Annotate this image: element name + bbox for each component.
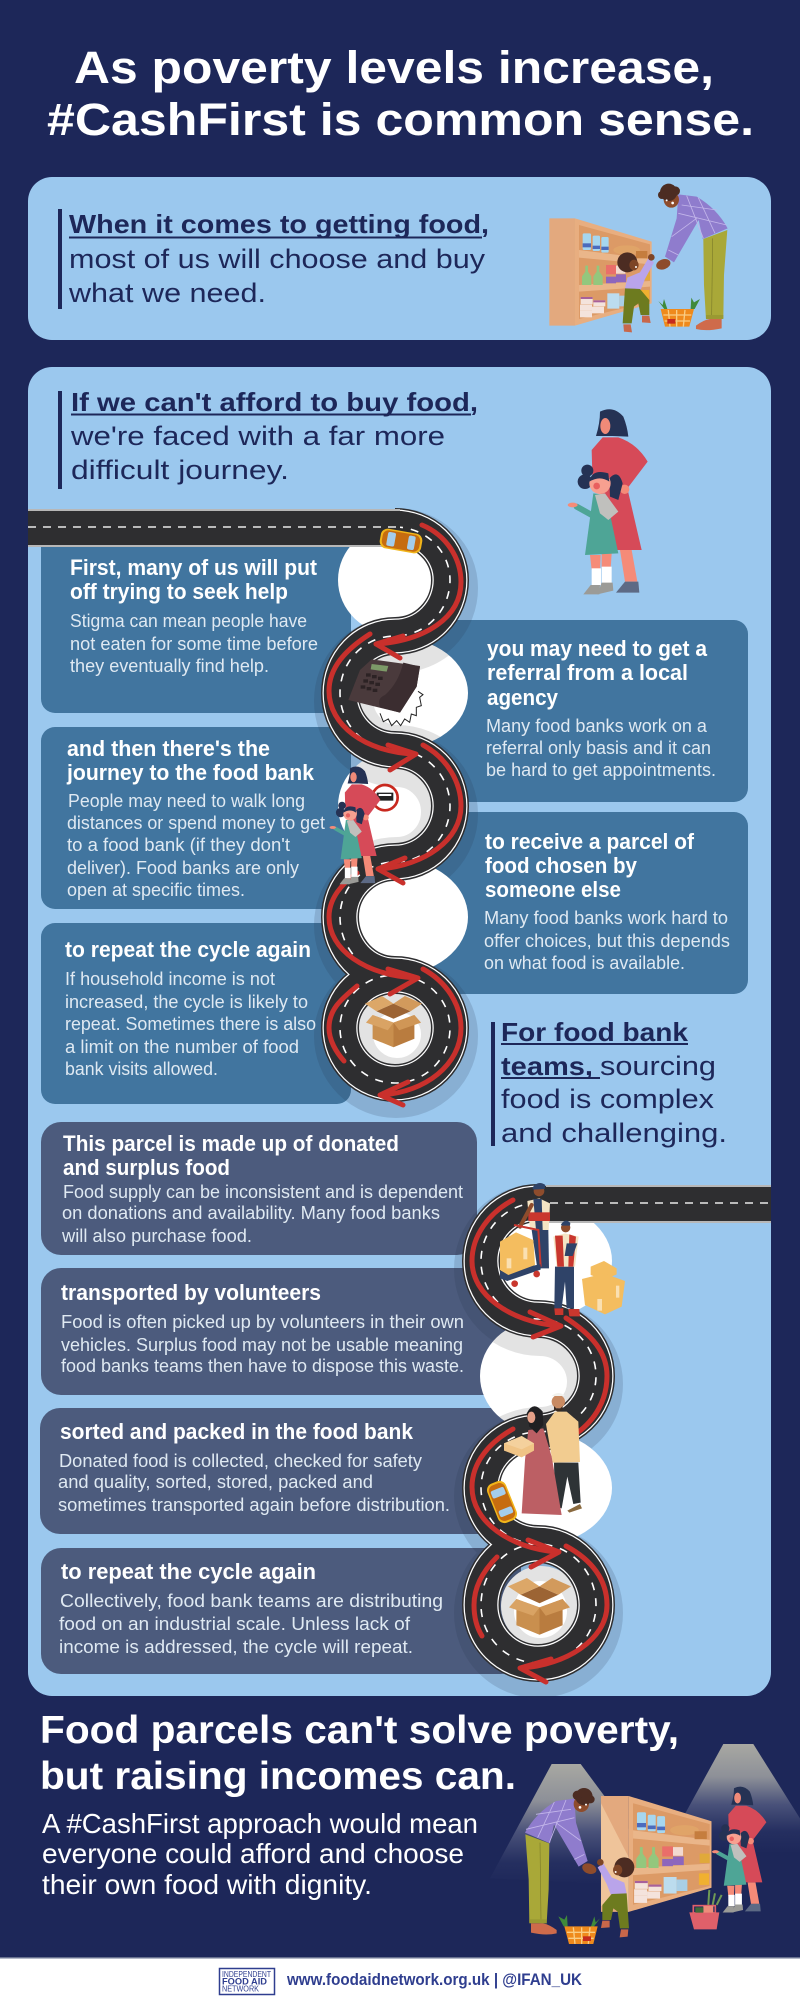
text block: put off seeking help: First, many of us will put [70, 555, 317, 580]
text block: if we can't afford to buy food: If we can't afford to buy food, [71, 387, 478, 417]
panel backgrounds: food bank teams journey [40, 1122, 521, 1674]
text block: parcel chosen by someone else: offer choices, but this depends [484, 930, 730, 951]
text block: put off seeking help: not eaten for some time before [70, 633, 318, 654]
text block: transported by volunteers: transported by volunteers [61, 1280, 321, 1305]
icon: families shopping under spotlights [490, 1744, 800, 1944]
text block: transported by volunteers: vehicles. Surplus food may not be usable meaning [61, 1334, 463, 1355]
text block: repeat the cycle, household: to repeat the cycle again [65, 937, 311, 962]
text block: journey to the food bank: open at specific times. [67, 879, 245, 900]
text block: referral from a local agency: you may need to get a [487, 636, 707, 661]
text block: sorted and packed: sorted and packed in the food bank [60, 1419, 413, 1444]
text block: put off seeking help: they eventually find help. [70, 655, 269, 676]
text block: journey to the food bank: and then there's the [67, 736, 270, 761]
text block: referral from a local agency: referral only basis and it can [486, 737, 711, 758]
text block: cash first approach: everyone could afford and choose [42, 1838, 464, 1869]
text block: journey to the food bank [66, 736, 325, 900]
icon: parcel box [365, 996, 422, 1047]
text block: for food bank teams: For food bank [501, 1017, 689, 1047]
text block: donated and surplus food: Food supply can be inconsistent and is dependent [63, 1181, 463, 1202]
icon: couple with box [504, 1393, 582, 1515]
text block: referral from a local agency: Many food banks work on a [486, 715, 708, 736]
text block: referral from a local agency: agency [487, 685, 558, 710]
footer band [0, 1957, 800, 2000]
text block: for food bank teams [491, 1017, 727, 1148]
text block: for food bank teams: food is complex [501, 1084, 715, 1114]
text block: donated and surplus food: and surplus food [63, 1155, 230, 1180]
text block: put off seeking help [70, 555, 318, 676]
title: As poverty levels increase, [74, 42, 714, 93]
chart: winding road, household journey [28, 509, 468, 1105]
text block: repeat the cycle, household: repeat. Sometimes there is also [65, 1013, 316, 1034]
panel: getting food [28, 177, 771, 340]
text block: repeat the cycle, household [65, 937, 316, 1079]
text block: repeat the cycle, food banks [59, 1559, 443, 1657]
text block: journey to the food bank: journey to the food bank [66, 760, 314, 785]
text block: repeat the cycle, food banks: food on an industrial scale. Unless lack of [59, 1613, 411, 1634]
text block: if we can't afford to buy food: difficult journey. [71, 455, 289, 485]
title: #CashFirst is common sense. [47, 94, 754, 145]
text block: repeat the cycle, household: bank visits allowed. [65, 1058, 218, 1079]
text block: repeat the cycle, household: a limit on the number of food [65, 1036, 299, 1057]
text block: donated and surplus food: on donations and availability. Many food banks [62, 1202, 440, 1223]
text block: donated and surplus food: This parcel is made up of donated [63, 1131, 399, 1156]
text block: for food bank teams: sourcing [600, 1051, 716, 1081]
logo: independent food aid network: NETWORK [222, 1984, 260, 1994]
footer link text: www.foodaidnetwork.org.uk | @IFAN_UK [286, 1970, 583, 1989]
text block: referral from a local agency: referral from a local [487, 660, 688, 685]
panel: difficult journey and food bank teams [28, 367, 771, 1696]
text block: parcel chosen by someone else [484, 829, 730, 973]
text block: for food bank teams: teams, [501, 1051, 593, 1081]
text block: if we can't afford to buy food: we're faced with a far more [70, 421, 445, 451]
text block: when it comes to getting food [58, 209, 489, 309]
text block: sorted and packed [58, 1419, 450, 1515]
logo: independent food aid network: INDEPENDENT [222, 1970, 271, 1979]
chart: winding road, food bank teams [464, 1185, 771, 1682]
text block: repeat the cycle, food banks: to repeat the cycle again [61, 1559, 316, 1584]
text block: donated and surplus food [61, 1131, 463, 1246]
icon: parcel box [508, 1578, 571, 1635]
heading: food parcels can't solve poverty: but raising incomes can. [40, 1755, 516, 1798]
text block: transported by volunteers: Food is often picked up by volunteers in their own [61, 1311, 464, 1332]
panel backgrounds: household journey [41, 530, 748, 1104]
text block: parcel chosen by someone else: on what food is available. [484, 952, 685, 973]
arrows: red direction of travel [329, 525, 461, 1105]
text block: parcel chosen by someone else: to receive a parcel of [485, 829, 694, 854]
title [47, 42, 754, 145]
text block: journey to the food bank: People may need to walk long [68, 790, 305, 811]
text block: cash first approach: A #CashFirst approach would mean [42, 1808, 478, 1839]
text block: when it comes to getting food: When it comes to getting food, [69, 209, 489, 239]
text block: for food bank teams: and challenging. [501, 1118, 727, 1148]
icon: telephone [348, 659, 423, 726]
text block: journey to the food bank: to a food bank (if they don't [67, 834, 290, 855]
text block: journey to the food bank: distances or spend money to get [67, 812, 325, 833]
text block: repeat the cycle, household: If household income is not [65, 968, 275, 989]
icon: mother and daughter walking [330, 767, 380, 884]
heading: food parcels can't solve poverty [40, 1709, 679, 1798]
text block: transported by volunteers [61, 1280, 464, 1376]
icon: mother and daughter [568, 409, 648, 594]
text block: sorted and packed: Donated food is collected, checked for safety [59, 1450, 423, 1471]
text block: when it comes to getting food: what we need. [68, 278, 266, 308]
icon: no bus sign [372, 785, 398, 810]
text block: repeat the cycle, food banks: income is addressed, the cycle will repeat. [59, 1636, 413, 1657]
text block: donated and surplus food: will also purchase food. [61, 1225, 252, 1246]
text block: when it comes to getting food: most of us will choose and buy [69, 244, 486, 274]
text block: repeat the cycle, household: increased, the cycle is likely to [65, 991, 308, 1012]
text block: journey to the food bank: deliver). Food banks are only [67, 857, 300, 878]
text block: referral from a local agency: be hard to get appointments. [486, 759, 716, 780]
text block: parcel chosen by someone else: food chosen by [485, 853, 637, 878]
text block: cash first approach [42, 1808, 478, 1900]
text block: parcel chosen by someone else: someone else [485, 877, 621, 902]
icon: family choosing food at shelf [549, 184, 728, 332]
text block: if we can't afford to buy food [58, 387, 478, 489]
text block: sorted and packed: sometimes transported again before distribution. [58, 1494, 450, 1515]
text block: put off seeking help: off trying to seek help [70, 579, 288, 604]
text block: put off seeking help: Stigma can mean people have [70, 610, 307, 631]
text block: cash first approach: their own food with dignity. [42, 1869, 372, 1900]
logo: independent food aid network [220, 1968, 274, 1994]
icon: car on road [485, 1479, 519, 1525]
icon: car on road [379, 528, 423, 554]
text block: sorted and packed: and quality, sorted, stored, packed and [58, 1471, 373, 1492]
text block: repeat the cycle, food banks: Collectively, food bank teams are distributing [60, 1590, 443, 1611]
logo: independent food aid network: FOOD AID [222, 1976, 268, 1986]
text block: transported by volunteers: food banks teams then have to dispose this waste. [61, 1355, 464, 1376]
text block: referral from a local agency [486, 636, 716, 780]
heading: food parcels can't solve poverty: Food parcels can't solve poverty, [40, 1709, 679, 1752]
icon: volunteers with boxes [500, 1183, 625, 1316]
text block: parcel chosen by someone else: Many food banks work hard to [484, 907, 728, 928]
arrows: red direction of travel [472, 1200, 607, 1682]
